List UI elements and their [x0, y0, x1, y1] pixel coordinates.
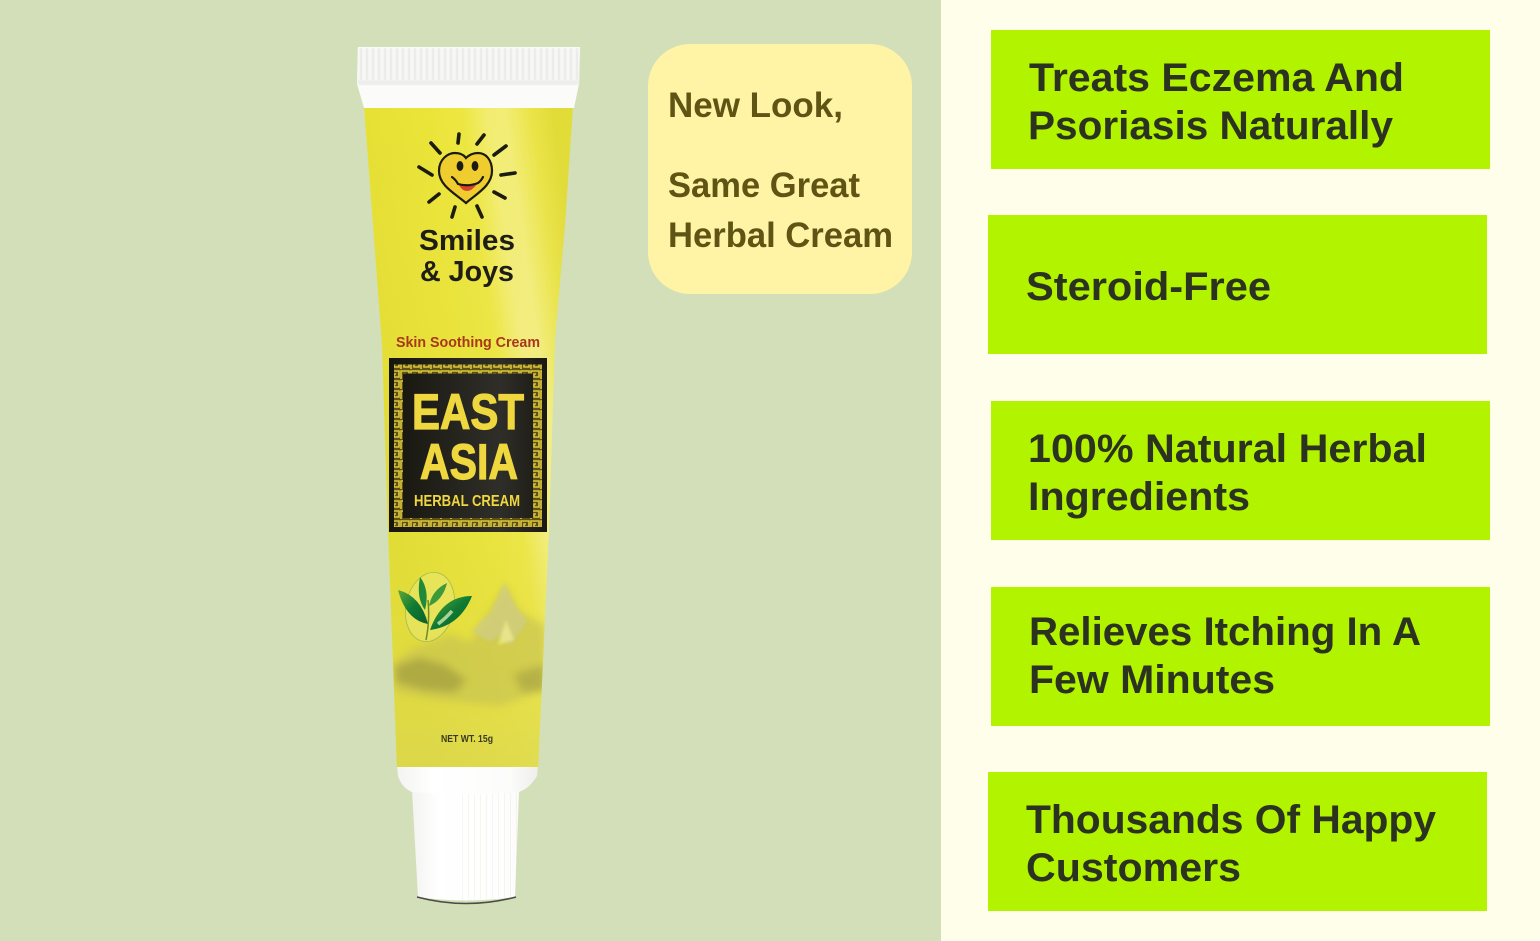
net weight: NET WT. 15g [441, 734, 493, 745]
benefit: happy customers [988, 772, 1487, 911]
benefit: treats eczema and psoriasis: Psoriasis Naturally [1028, 104, 1394, 148]
brand name: Smiles [419, 225, 515, 257]
benefit: relieves itching [991, 587, 1490, 726]
benefit: treats eczema and psoriasis: Treats Eczema And [1029, 56, 1404, 100]
benefit: treats eczema and psoriasis [991, 30, 1490, 169]
benefit: happy customers: Thousands Of Happy [1026, 798, 1437, 842]
black product label: HERBAL CREAM [414, 493, 520, 510]
brand name [419, 225, 515, 288]
screw cap [397, 767, 538, 904]
crimped tube end [357, 47, 580, 108]
black product label [389, 358, 547, 532]
benefit: steroid-free [988, 215, 1487, 354]
benefit: relieves itching: Relieves Itching In A [1029, 610, 1421, 654]
callout: new look: New Look, [668, 86, 843, 125]
benefit: natural herbal ingredients: 100% Natural Herbal [1028, 427, 1427, 471]
benefit: happy customers: Customers [1026, 846, 1241, 890]
callout: new look: Same Great [668, 166, 860, 205]
black product label: ASIA [420, 434, 518, 490]
benefit: steroid-free: Steroid-Free [1026, 265, 1271, 309]
product descriptor: Skin Soothing Cream [396, 335, 540, 351]
benefit: natural herbal ingredients: Ingredients [1028, 475, 1250, 519]
black product label: EAST [412, 384, 524, 440]
callout: new look: Herbal Cream [668, 216, 893, 255]
brand name: & Joys [420, 256, 514, 288]
icon: smiling heart sun logo [419, 134, 515, 217]
benefit: relieves itching: Few Minutes [1029, 658, 1275, 702]
misty mountains illustration [392, 582, 545, 706]
right background panel [941, 0, 1540, 941]
icon: tea leaf [398, 568, 472, 646]
benefit: natural herbal ingredients [991, 401, 1490, 540]
callout: new look [648, 44, 912, 294]
product tube [357, 47, 580, 904]
left background panel [0, 0, 941, 941]
tube body [364, 106, 573, 770]
